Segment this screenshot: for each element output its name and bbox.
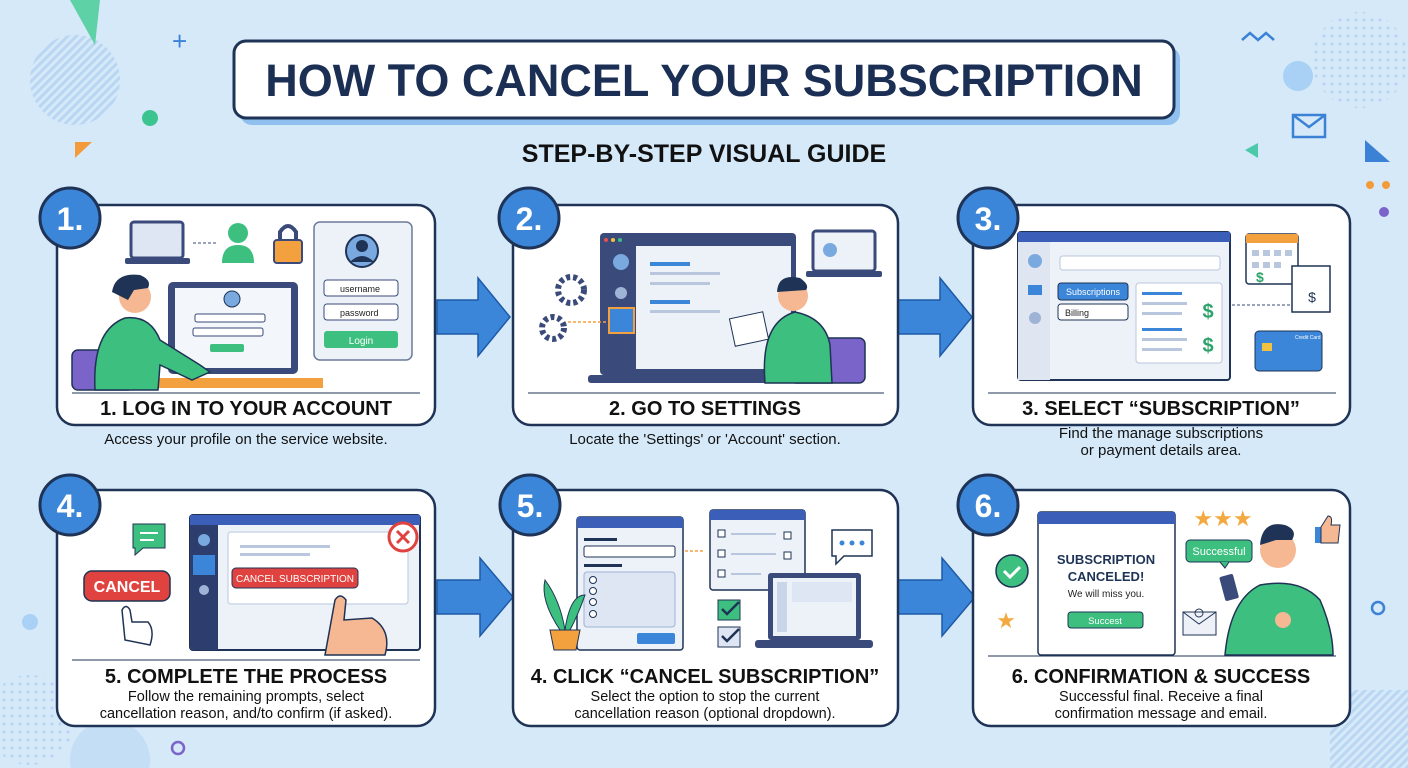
panel: step 6 confirmation [973,490,1350,726]
icon: calendar: $ [1256,269,1264,285]
panel: step 2 settings [513,205,898,425]
cancel button [84,571,170,645]
browser window: Subscriptions [1066,287,1121,297]
panel: step 1 login [57,205,435,425]
number badges: 6. [975,488,1001,524]
icon: lock [274,226,302,263]
confirmation window: SUBSCRIPTION [1057,552,1155,567]
form window [577,517,683,650]
plant [544,580,585,650]
icon: gears [542,277,584,339]
icon: x circle [389,523,417,551]
confirmation window: We will miss you. [1068,589,1144,600]
panel: step 4 complete process [57,490,435,726]
icon: thumbs up [1315,516,1340,543]
panel: step 3 subscription [973,205,1350,425]
icon: check circle [996,555,1028,587]
number badges [40,188,1018,535]
panel: step 4 complete process: Follow the remaining prompts, select [128,689,364,705]
confirmation window: CANCELED! [1068,569,1144,584]
panel: step 1 login: 1. LOG IN TO YOUR ACCOUNT [100,398,392,420]
background decorations: + [172,26,187,56]
description 1: Access your profile on the service website. [104,431,388,448]
number badges: 1. [57,201,83,237]
number badges: 5. [517,488,543,524]
description 3: or payment details area. [1081,442,1241,459]
icon: star: ★ [996,608,1016,633]
person at desk [72,275,323,390]
icon: calendar [1246,234,1298,285]
description 3: Find the manage subscriptions [1059,425,1263,442]
checklist window [710,510,805,590]
monitor with settings [588,233,808,383]
panel: step 6 confirmation: Successful final. Receive a final [1059,689,1263,705]
login card [314,222,412,360]
login card: password [340,308,379,318]
panel: step 5 click cancel: 4. CLICK “CANCEL SUBSCRIPTION” [531,666,879,688]
panel: step 4 complete process: 5. COMPLETE THE PROCESS [105,666,387,688]
title: HOW TO CANCEL YOUR SUBSCRIPTION [265,55,1143,106]
description 2: Locate the 'Settings' or 'Account' section. [569,431,841,448]
panel: step 3 subscription: 3. SELECT “SUBSCRIPTION” [1022,398,1300,420]
icon: stars: ★★★ [1193,506,1253,531]
successful bubble [1186,540,1252,568]
browser window [1018,232,1230,380]
login card: Login [349,336,373,347]
hand [325,596,387,655]
window with cancel subscription [190,515,420,650]
panel: step 5 click cancel: cancellation reason (optional dropdown). [574,706,836,722]
description 3 [1059,425,1263,459]
icon: chat [133,524,165,555]
person with phone [1219,524,1333,655]
icon: credit card [1255,331,1322,371]
icon: envelope [1183,609,1216,635]
successful bubble: Successful [1192,546,1246,558]
panel: step 6 confirmation: 6. CONFIRMATION & SUCCESS [1012,666,1310,688]
arrows row 2 [437,558,975,636]
panel: step 5 click cancel: Select the option to stop the current [591,689,819,705]
person reading [729,277,865,383]
number badges: 3. [975,201,1001,237]
number badges: 4. [57,488,83,524]
confirmation window: Succest [1088,616,1122,627]
browser window: Billing [1065,308,1089,318]
login card: username [340,284,380,294]
panel: step 5 click cancel [513,490,898,726]
icon: small laptop [806,231,882,277]
confirmation window [1038,512,1175,655]
icon: credit card: Credit Card [1295,335,1321,341]
title [234,41,1180,125]
computer monitor [168,282,298,374]
laptop [755,573,873,648]
panel: step 6 confirmation: confirmation message and email. [1055,706,1267,722]
number badges: 2. [516,201,542,237]
panel: step 2 settings: 2. GO TO SETTINGS [609,398,801,420]
panel: step 4 complete process: cancellation reason, and/to confirm (if asked). [100,706,392,722]
window with cancel subscription: CANCEL SUBSCRIPTION [236,574,354,585]
icon: laptop [125,222,190,264]
arrows row 1 [437,278,972,356]
cancel button: CANCEL [94,579,161,596]
icon: checkboxes [718,600,740,647]
icon: chat dots [832,530,872,564]
browser window: $ [1202,335,1214,357]
icon: invoice: $ [1308,289,1316,305]
icon: invoice [1292,266,1330,312]
icon: user [222,223,254,263]
browser window: $ [1202,301,1214,323]
subtitle: STEP-BY-STEP VISUAL GUIDE [522,140,886,168]
